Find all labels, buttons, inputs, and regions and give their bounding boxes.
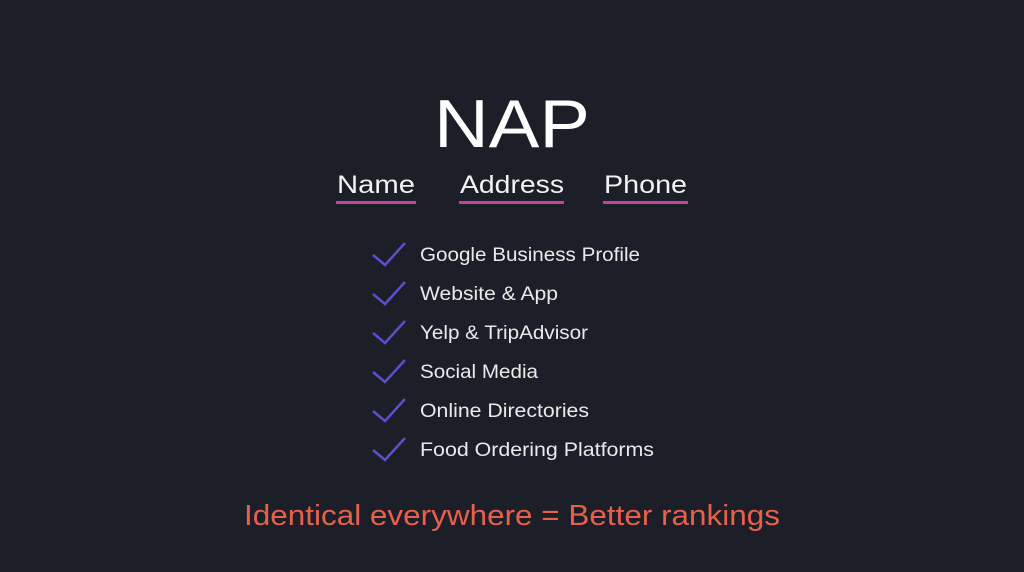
item: Website & App: [373, 282, 558, 305]
item: Online Directories: [373, 399, 589, 422]
item: Website & App: Website & App: [420, 284, 558, 305]
item: Yelp & TripAdvisor: Yelp & TripAdvisor: [420, 323, 589, 344]
item: Google Business Profile: Google Business Profile: [420, 245, 640, 266]
item: Food Ordering Platforms: [373, 438, 654, 461]
item: Google Business Profile: [373, 243, 640, 266]
label: Address: Address: [460, 171, 564, 199]
tagline: Identical everywhere = Better rankings: [244, 500, 780, 532]
title: NAP: [434, 86, 590, 162]
item: Yelp & TripAdvisor: [373, 321, 589, 344]
NAP labels with underlines: [336, 171, 688, 204]
item: Social Media: [373, 360, 538, 383]
item: Online Directories: Online Directories: [420, 401, 589, 422]
item: Social Media: Social Media: [420, 362, 538, 383]
checklist: [373, 243, 654, 461]
label: Phone: Phone: [604, 171, 687, 199]
label: Name: Name: [337, 171, 415, 199]
item: Food Ordering Platforms: Food Ordering Platforms: [420, 440, 654, 461]
